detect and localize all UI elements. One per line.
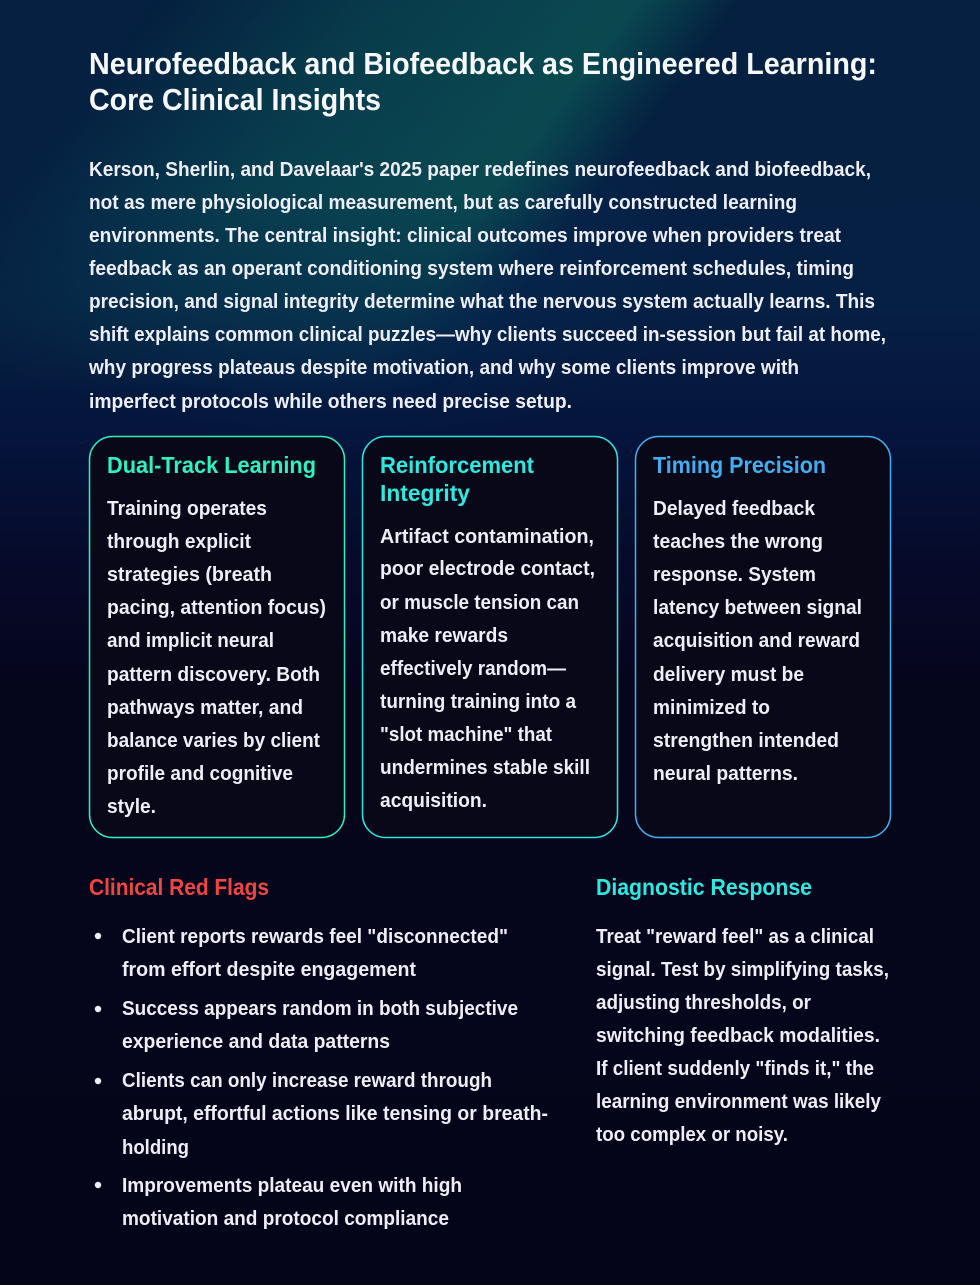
list item 2: Success appears random in both subjective	[122, 997, 518, 1020]
text: dual-track body: style.	[107, 795, 156, 818]
text: reinforcement body: make rewards	[380, 624, 508, 647]
text: dual-track body: pattern discovery. Both	[107, 663, 320, 686]
text: timing body: acquisition and reward	[653, 629, 860, 652]
text: diagnostic body: switching feedback modalities.	[596, 1024, 880, 1047]
list item 2: experience and data patterns	[122, 1030, 390, 1053]
text: dual-track body: profile and cognitive	[107, 762, 293, 785]
text: reinforcement body: acquisition.	[380, 789, 487, 812]
panel: dual-track learning	[90, 436, 344, 838]
text: dual-track body	[107, 497, 326, 818]
text: dual-track body: through explicit	[107, 530, 251, 553]
text: timing body: teaches the wrong	[653, 530, 823, 553]
text: timing body: latency between signal	[653, 596, 862, 619]
panel: timing precision	[636, 436, 890, 838]
heading: reinforcement integrity: Reinforcement	[380, 452, 534, 478]
panel: clinical red flags	[89, 874, 548, 1230]
text: reinforcement body	[380, 525, 595, 812]
text: diagnostic body	[596, 925, 889, 1146]
list item 3	[95, 1069, 548, 1159]
list item 4	[95, 1174, 462, 1230]
intro paragraph: environments. The central insight: clinical outcomes improve when providers treat	[89, 224, 841, 247]
text: reinforcement body: undermines stable skill	[380, 756, 590, 779]
text: diagnostic body: adjusting thresholds, or	[596, 991, 811, 1014]
text: timing body	[653, 497, 862, 785]
title: Core Clinical Insights	[89, 82, 381, 117]
heading: reinforcement integrity: Integrity	[380, 480, 470, 506]
intro paragraph: why progress plateaus despite motivation, and why some clients improve with	[88, 356, 799, 379]
intro paragraph: feedback as an operant conditioning system where reinforcement schedules, timing	[89, 257, 854, 280]
intro paragraph: imperfect protocols while others need precise setup.	[89, 390, 572, 413]
text: diagnostic body: signal. Test by simplifying tasks,	[596, 958, 889, 981]
text: dual-track body: strategies (breath	[107, 563, 272, 586]
text: dual-track body: and implicit neural	[107, 629, 274, 652]
title	[89, 46, 877, 117]
text: timing body: delivery must be	[653, 663, 804, 686]
text: timing body: response. System	[653, 563, 816, 586]
text: timing body: neural patterns.	[653, 762, 798, 785]
text: dual-track body: pacing, attention focus)	[107, 596, 326, 619]
text: diagnostic body: learning environment was likely	[596, 1090, 882, 1113]
text: diagnostic body: too complex or noisy.	[596, 1123, 788, 1146]
text: timing body: strengthen intended	[653, 729, 839, 752]
panel: diagnostic response	[596, 874, 889, 1146]
text: reinforcement body: or muscle tension can	[380, 591, 579, 614]
heading: timing precision: Timing Precision	[653, 452, 826, 478]
list item 4: Improvements plateau even with high	[122, 1174, 462, 1197]
text: dual-track body: Training operates	[107, 497, 267, 520]
list item 2	[95, 997, 518, 1053]
text: diagnostic body: If client suddenly "finds it," the	[596, 1057, 874, 1080]
list item 3: holding	[122, 1136, 189, 1159]
list item 1: Client reports rewards feel "disconnected"	[122, 925, 508, 948]
intro paragraph: not as mere physiological measurement, but as carefully constructed learning	[89, 191, 797, 214]
intro paragraph: precision, and signal integrity determine what the nervous system actually learns. This	[89, 290, 875, 313]
list item 1	[95, 925, 508, 981]
text: dual-track body: pathways matter, and	[107, 696, 303, 719]
background gradient	[0, 0, 980, 636]
list item 4: motivation and protocol compliance	[122, 1207, 449, 1230]
text: reinforcement body: Artifact contamination,	[380, 525, 594, 548]
text: dual-track body: balance varies by client	[107, 729, 320, 752]
text: reinforcement body: "slot machine" that	[380, 723, 552, 746]
text: reinforcement body: poor electrode contact,	[380, 557, 595, 580]
title: Neurofeedback and Biofeedback as Engineered Learning:	[89, 46, 877, 81]
text: timing body: Delayed feedback	[653, 497, 816, 520]
heading: reinforcement integrity	[380, 452, 534, 506]
heading: clinical red flags: Clinical Red Flags	[89, 874, 269, 900]
intro paragraph: shift explains common clinical puzzles—why clients succeed in-session but fail at home,	[89, 323, 886, 346]
intro paragraph	[88, 158, 886, 413]
text: reinforcement body: turning training into a	[380, 690, 577, 713]
heading: dual-track learning: Dual-Track Learning	[107, 452, 316, 478]
list item 3: abrupt, effortful actions like tensing or breath-	[122, 1102, 548, 1125]
text: diagnostic body: Treat "reward feel" as a clinical	[596, 925, 874, 948]
intro paragraph: Kerson, Sherlin, and Davelaar's 2025 paper redefines neurofeedback and biofeedback,	[89, 158, 871, 181]
text: reinforcement body: effectively random—	[380, 657, 566, 680]
heading: diagnostic response: Diagnostic Response	[596, 874, 812, 900]
list item 1: from effort despite engagement	[122, 958, 416, 981]
list item 3: Clients can only increase reward through	[122, 1069, 492, 1092]
panel: reinforcement integrity	[362, 436, 618, 838]
text: timing body: minimized to	[653, 696, 770, 719]
